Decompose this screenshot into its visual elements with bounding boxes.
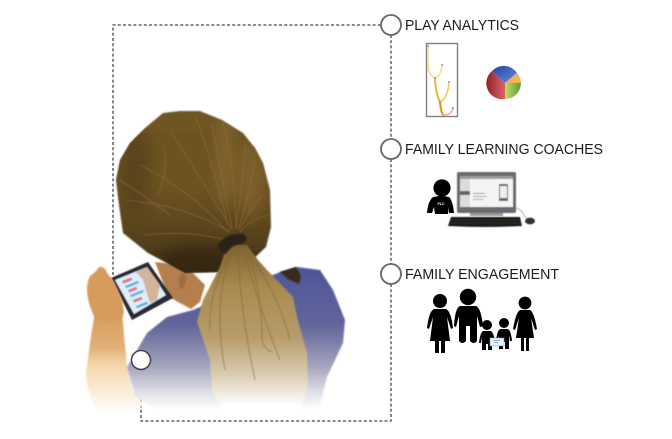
heading: FAMILY LEARNING COACHES: [405, 142, 603, 158]
icon: desktop computer: [448, 172, 535, 227]
hand: [87, 267, 124, 323]
dashed connector frame: [113, 25, 391, 421]
heading: PLAY ANALYTICS: [405, 18, 519, 34]
grandmother: [513, 297, 537, 351]
icon: branching tree chart: [426, 44, 458, 116]
shared tablet: [490, 338, 504, 346]
tablet: [111, 262, 173, 320]
hair shading and strands: [119, 110, 268, 276]
mother: [427, 294, 453, 353]
node: photo: [132, 350, 150, 370]
node: [381, 15, 401, 35]
icon: pie chart: [486, 66, 521, 99]
shirt: [127, 267, 345, 414]
icon: coach figure: [427, 179, 454, 214]
section: family engagement: [381, 264, 559, 353]
mouse: [525, 218, 535, 224]
child two: [496, 318, 512, 349]
ear: [179, 274, 186, 289]
section: family learning coaches: [381, 139, 603, 227]
head of hair: [116, 111, 271, 273]
section: play analytics: [381, 15, 521, 116]
hair tie: [218, 234, 246, 254]
ponytail: [197, 245, 308, 414]
keyboard: [448, 217, 522, 227]
dark hair lock at shoulder: [280, 267, 301, 284]
ponytail strands: [210, 250, 290, 380]
arm: [86, 312, 145, 414]
face and neck: [155, 262, 205, 309]
icon: coach figure: PLC: [438, 202, 445, 206]
node: [381, 139, 401, 159]
infographic: [85, 14, 602, 422]
father: [454, 289, 483, 343]
photo: child playing on a tablet: [86, 110, 345, 414]
icon: family of silhouettes with tablet: [427, 289, 537, 353]
heading: FAMILY ENGAGEMENT: [405, 267, 559, 283]
node: [381, 264, 401, 284]
child one: [479, 320, 495, 350]
